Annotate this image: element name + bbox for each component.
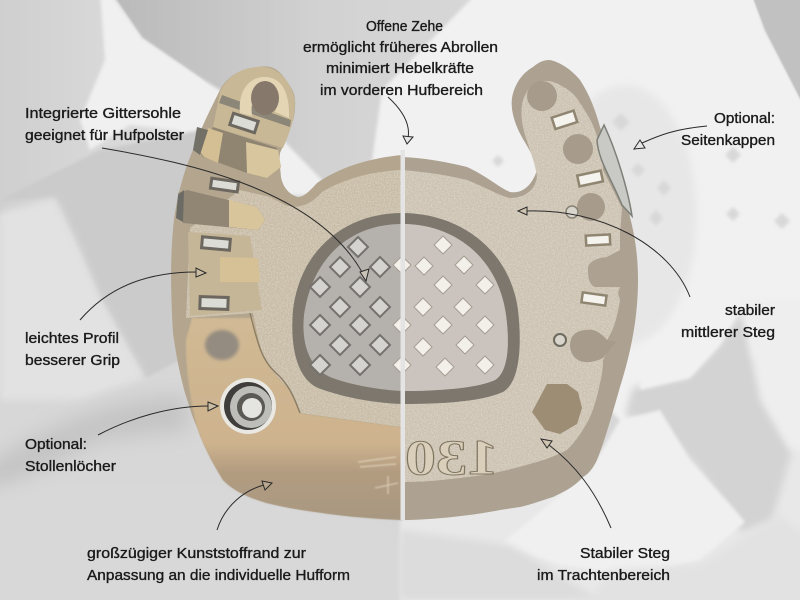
tread blur left [205, 330, 239, 360]
label: plastic rim [87, 546, 350, 584]
arrow: heel web [541, 439, 611, 528]
label: light tread: besserer Grip [25, 353, 120, 369]
grid diamonds [310, 236, 494, 376]
label: middle web [681, 303, 775, 341]
side cap [597, 125, 632, 216]
plastic rim right [402, 60, 638, 520]
label: middle web: mittlerer Steg [681, 325, 775, 341]
plastic rim left [171, 66, 402, 520]
arrow: plastic rim [217, 481, 272, 530]
label: open toe [303, 19, 498, 99]
label: light tread: leichtes Profil [25, 331, 119, 347]
holes right [527, 81, 616, 434]
plate step line [250, 313, 300, 413]
label: plastic rim: Anpassung an die individuelle Hufform [87, 568, 350, 584]
label: middle web: stabiler [725, 303, 775, 319]
lettering left [358, 457, 398, 494]
nail slots right [552, 111, 610, 306]
label: heel web: im Trachtenbereich [537, 568, 670, 584]
label: side caps: Optional: [714, 111, 775, 127]
ghost grid of hoof sole [492, 113, 790, 229]
number stamp 130: 130 [405, 429, 498, 485]
arrow: stud holes [98, 402, 218, 435]
label: light tread [25, 331, 120, 369]
label: side caps: Seitenkappen [681, 133, 775, 149]
horseshoe: left half [171, 66, 402, 520]
hole in toe branch [240, 77, 289, 118]
arrow: open toe [388, 97, 413, 144]
label: stud holes [25, 437, 116, 475]
toe branch segments [176, 67, 295, 316]
grid pad [303, 224, 508, 391]
rivets right [566, 206, 578, 218]
label: plastic rim: großzügiger Kunststoffrand zur [87, 546, 306, 562]
label: integrated grid sole [25, 106, 184, 144]
centre divider [400, 150, 405, 520]
arrow: side caps [634, 126, 707, 149]
arrow: middle web [518, 207, 690, 297]
window rim [292, 213, 520, 404]
label: integrated grid sole: Integrierte Gittersohle [25, 106, 181, 122]
label: open toe: ermöglicht früheres Abrollen [303, 40, 498, 56]
label: side caps [681, 111, 775, 149]
label: stud holes: Stollenlöcher [25, 459, 116, 475]
metal plate right [402, 81, 622, 482]
plastic tan lower [186, 318, 402, 520]
metal plate left [186, 170, 402, 427]
stud hole [220, 378, 276, 434]
label: open toe: im vorderen Hufbereich [320, 83, 483, 99]
label: heel web: Stabiler Steg [580, 546, 670, 562]
nail slots left [200, 113, 258, 309]
horseshoe: right half [402, 60, 638, 520]
label: stud holes: Optional: [25, 437, 87, 453]
arrow: grid sole [102, 148, 369, 281]
label: open toe: Offene Zehe [366, 19, 443, 35]
label: heel web [537, 546, 670, 584]
label: integrated grid sole: geeignet für Hufpolster [25, 128, 184, 144]
label: open toe: minimiert Hebelkräfte [326, 61, 474, 77]
arrow: tread [80, 268, 206, 320]
